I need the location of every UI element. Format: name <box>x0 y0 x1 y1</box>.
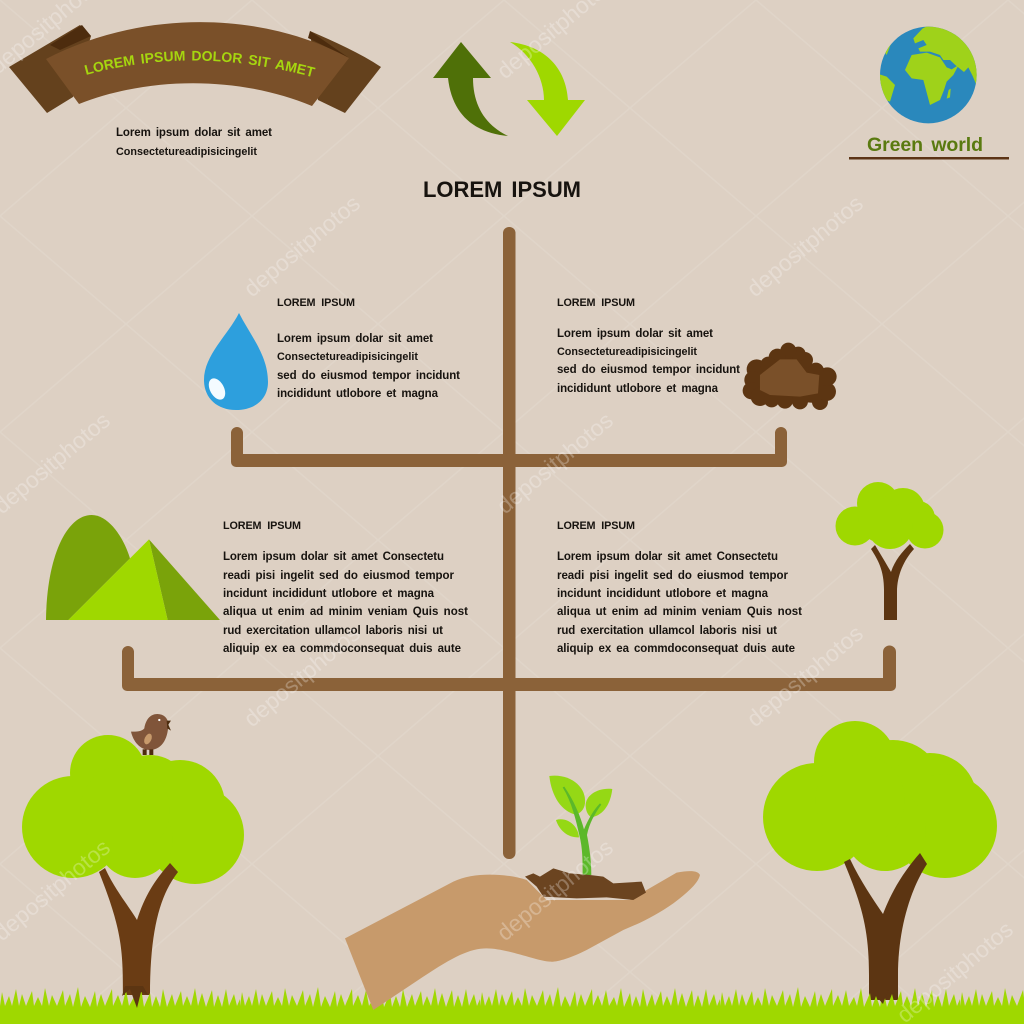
dark green up arrow <box>433 42 508 136</box>
panel: water text: Consectetureadipisicingelit <box>277 351 418 363</box>
panel: tree text: LOREM IPSUM <box>557 520 635 532</box>
icon: large right tree <box>763 721 997 1000</box>
panel: mountains text: LOREM IPSUM <box>223 520 301 532</box>
watermark: depositphotos <box>742 190 868 302</box>
panel: soil text: sed do eiusmod tempor incidunt <box>557 364 740 376</box>
tree root tufts <box>122 984 898 1008</box>
sprout <box>549 776 612 875</box>
banner ribbon <box>9 22 381 113</box>
light green down arrow <box>510 42 585 136</box>
panel: mountains text: aliqua ut enim ad minim veniam Quis nost <box>223 606 468 618</box>
intro text: Consectetureadipisicingelit <box>116 146 257 158</box>
icon: soil mound <box>743 343 837 410</box>
panel: mountains text: aliquip ex ea commdoconsequat duis aute <box>223 643 461 655</box>
central trunk line and brackets <box>122 227 896 859</box>
panel: soil text: incididunt utlobore et magna <box>557 383 719 395</box>
panel: soil text <box>557 297 740 395</box>
panel: mountains text: incidunt incididunt utlobore et magna <box>223 588 435 600</box>
panel: tree text <box>557 520 802 655</box>
panel: water text: sed do eiusmod tempor incidunt <box>277 370 460 382</box>
watermark: depositphotos <box>492 834 618 946</box>
icon: small tree <box>836 482 944 620</box>
panel: tree text: readi pisi ingelit sed do eiusmod tempor <box>557 570 789 582</box>
ribbon left tail <box>9 25 91 113</box>
panel: mountains text <box>223 520 468 655</box>
panel: soil text: Lorem ipsum dolar sit amet <box>557 328 713 340</box>
ribbon right tail <box>310 31 381 113</box>
ribbon main band <box>46 22 349 106</box>
panel: water text <box>277 297 460 400</box>
soil in palm <box>525 868 646 900</box>
hand <box>345 871 700 1010</box>
panel: tree text: aliquip ex ea commdoconsequat duis aute <box>557 643 795 655</box>
panel: water text: Lorem ipsum dolar sit amet <box>277 333 433 345</box>
grass strip <box>0 985 1024 1024</box>
panel: mountains text: Lorem ipsum dolar sit amet Consectetu <box>223 551 444 563</box>
intro text: Lorem ipsum dolar sit amet <box>116 127 272 139</box>
panel: water text: LOREM IPSUM <box>277 297 355 309</box>
watermark: depositphotos <box>492 407 618 519</box>
icon: bird <box>131 714 171 755</box>
green world label: Green world <box>867 134 983 156</box>
panel: soil text: Consectetureadipisicingelit <box>557 346 697 358</box>
main heading: LOREM IPSUM <box>423 177 581 202</box>
panel: mountains text: rud exercitation ullamcol laboris nisi ut <box>223 625 443 637</box>
watermark: depositphotos <box>239 190 365 302</box>
ribbon title: LOREM IPSUM DOLOR SIT AMET <box>84 50 316 76</box>
watermark: depositphotos <box>239 620 365 732</box>
icon: globe <box>880 26 977 124</box>
icon: water drop <box>204 313 268 410</box>
panel: water text: incididunt utlobore et magna <box>277 388 439 400</box>
icon: hand holding sprout <box>345 776 700 1010</box>
icon: mountains <box>46 515 220 620</box>
watermark: depositphotos <box>742 620 868 732</box>
icon: recycle arrows <box>433 42 585 136</box>
panel: tree text: Lorem ipsum dolar sit amet Consectetu <box>557 551 778 563</box>
panel: tree text: rud exercitation ullamcol laboris nisi ut <box>557 625 777 637</box>
panel: soil text: LOREM IPSUM <box>557 297 635 309</box>
panel: tree text: aliqua ut enim ad minim veniam Quis nost <box>557 606 802 618</box>
panel: tree text: incidunt incididunt utlobore et magna <box>557 588 769 600</box>
intro text <box>116 127 272 158</box>
panel: mountains text: readi pisi ingelit sed do eiusmod tempor <box>223 570 455 582</box>
icon: large left tree <box>22 735 244 995</box>
